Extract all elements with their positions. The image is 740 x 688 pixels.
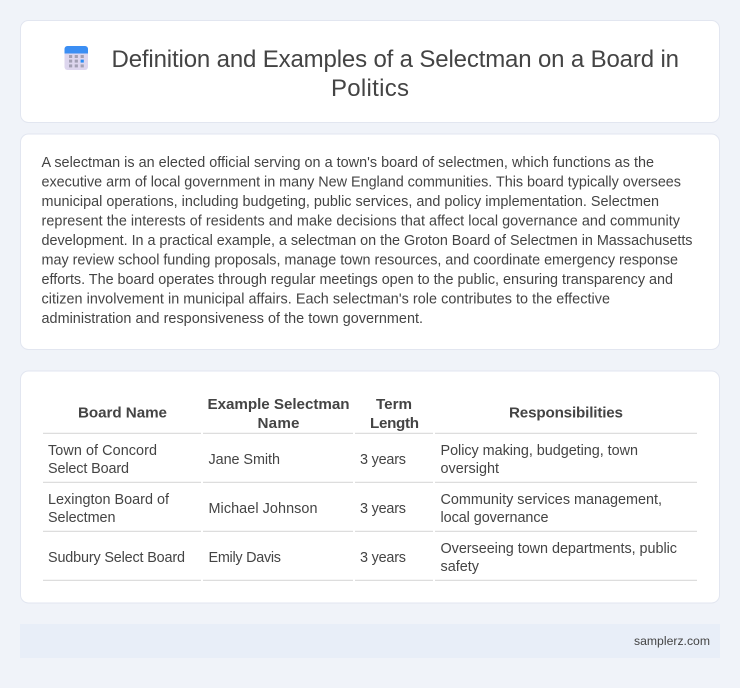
table row: Lexington: 3 years xyxy=(360,501,406,517)
text block: definition paragraph: administration and responsiveness of the town government. xyxy=(42,311,423,327)
panel: title xyxy=(20,20,720,122)
table row: Concord: oversight xyxy=(440,461,499,477)
table row: Concord: 3 years xyxy=(360,452,406,468)
title: Definition and Examples of a Selectman on a Board in xyxy=(112,46,679,73)
text block: definition paragraph: A selectman is an elected official serving on a town's board of selectmen, which functions as the xyxy=(42,155,654,171)
table row: Concord xyxy=(48,443,638,477)
title: Politics xyxy=(331,75,409,102)
title xyxy=(112,46,679,102)
table row: Lexington: local governance xyxy=(440,510,548,526)
panel: table xyxy=(20,371,720,603)
table row: Concord: Town of Concord xyxy=(48,443,157,459)
table row: Sudbury xyxy=(48,541,677,575)
table row: Lexington: Community services management, xyxy=(440,492,662,508)
text block: definition paragraph: municipal operations, including budgeting, public services, and policy implementation. Selectmen xyxy=(42,194,659,210)
footer: samplerz.com xyxy=(634,634,710,648)
table header: Name xyxy=(258,415,300,432)
table row: Sudbury: safety xyxy=(440,559,480,575)
table header: Example Selectman xyxy=(208,396,350,413)
table row: Concord: Policy making, budgeting, town xyxy=(440,443,638,459)
icon: calendar xyxy=(64,46,88,70)
table header: Responsibilities xyxy=(509,404,623,422)
table row: Sudbury: Overseeing town departments, public xyxy=(440,541,677,557)
table row: Concord: Jane Smith xyxy=(208,452,280,468)
table row: Lexington: Lexington Board of xyxy=(48,492,170,508)
table header xyxy=(78,396,623,432)
table header: Board Name xyxy=(78,404,167,422)
table row: Concord: Select Board xyxy=(48,461,129,477)
text block: definition paragraph: represent the interests of residents and make decisions that affect local governance and community xyxy=(42,214,681,230)
text block: definition paragraph: development. In a practical example, a selectman on the Groton Board of Selectmen in Massachusetts xyxy=(42,233,692,249)
table header: Term xyxy=(376,396,412,413)
table header: Length xyxy=(370,415,419,432)
table row: Lexington: Michael Johnson xyxy=(208,501,318,517)
table row: Sudbury: 3 years xyxy=(360,550,406,566)
table row: Lexington xyxy=(48,492,662,526)
table row: Lexington: Selectmen xyxy=(48,510,116,526)
text block: definition paragraph: may review school funding proposals, manage town resources, and coordinate emergency response xyxy=(42,252,678,268)
table row: Sudbury: Emily Davis xyxy=(208,550,281,566)
text block: definition paragraph: citizen involvement in municipal affairs. Each selectman's role contributes to the effective xyxy=(42,292,610,308)
text block: definition paragraph xyxy=(42,155,692,327)
text block: definition paragraph: efforts. The board operates through regular meetings open to the public, ensuring transparency and xyxy=(42,272,673,288)
panel: definition text xyxy=(20,134,720,350)
text block: definition paragraph: executive arm of local government in many New England communities. This board typically oversees xyxy=(42,174,681,190)
footer xyxy=(20,624,720,658)
table row: Sudbury: Sudbury Select Board xyxy=(48,550,185,566)
